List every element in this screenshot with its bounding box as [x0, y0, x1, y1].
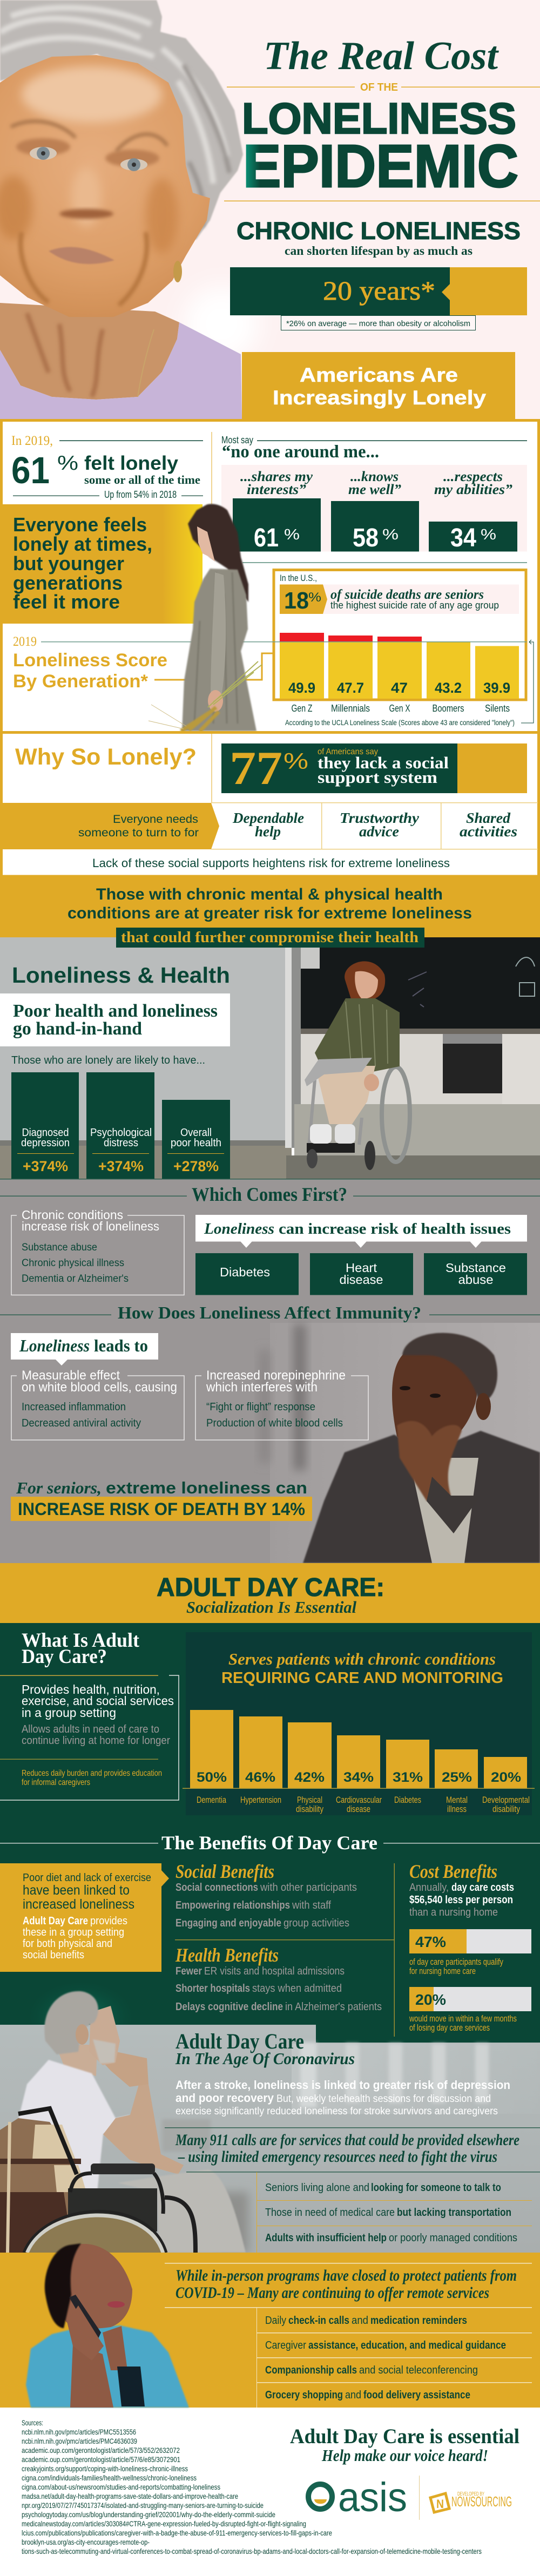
panel: gray immunity background	[0, 1179, 540, 1563]
box: heart disease: Heart	[346, 1261, 377, 1275]
title: LONELINESS	[242, 94, 516, 143]
panel: most say no one around me: my abilities”	[434, 482, 512, 497]
bar chart: patient conditions: Cardiovascular	[336, 1795, 382, 1805]
panel: younger generations callout: Everyone feels	[13, 513, 147, 536]
panel: what is adult day care: in a group setting	[22, 1706, 116, 1720]
panel: most say no one around me: %	[382, 526, 399, 543]
photo: elderly woman portrait	[0, 0, 259, 419]
box: increased norepinephrine: “Fight or flight” response	[206, 1401, 315, 1413]
text block: sources	[22, 2418, 482, 2555]
bar chart: patient conditions	[183, 1710, 535, 1814]
box: heart disease: disease	[339, 1273, 383, 1287]
panel: adult day care in the age of coronavirus: Adult Day Care	[176, 2029, 304, 2053]
list: remote services offered: and	[352, 2315, 368, 2327]
bar: overall poor health: Overall	[180, 1127, 212, 1139]
callout: increase risk of death by 14 percent: For seniors,	[16, 1478, 102, 1497]
box: diabetes: Diabetes	[220, 1265, 270, 1279]
bar: overall poor health: poor health	[171, 1137, 221, 1149]
bar: overall poor health: +278%	[173, 1158, 219, 1174]
logo: Oasis: asis	[338, 2474, 407, 2520]
text block: sources: brooklyn-usa.org/as-city-encourages-remote-op-	[22, 2538, 150, 2546]
text block: cost benefits: Annually,	[409, 1882, 449, 1894]
panel: 61 percent felt lonely: some or all of the time	[84, 473, 200, 486]
row: someone to turn to for: Trustworthy	[340, 810, 420, 826]
callout: poor diet and lack of exercise: Adult Day Care	[23, 1915, 88, 1927]
list: remote services offered: food delivery assistance	[363, 2389, 470, 2401]
panel: what is adult day care: Provides health, nutrition,	[22, 1682, 160, 1696]
bar chart: loneliness score by generation: Millennials	[331, 703, 370, 714]
callout: poor diet and lack of exercise	[0, 1863, 169, 1972]
bar chart: patient conditions: disease	[347, 1804, 370, 1814]
row: someone to turn to for: someone to turn to for	[78, 827, 199, 839]
text block: social benefits: group activities	[284, 1917, 349, 1929]
bar chart: loneliness score by generation: 47.7	[337, 680, 364, 696]
panel: green day care background	[0, 1623, 540, 2043]
text block: health benefits	[175, 1944, 382, 2013]
photo: thoughtful older man	[259, 1323, 540, 1563]
text block: health benefits: Shorter hospitals	[176, 1983, 250, 1994]
panel: which comes first	[0, 1184, 540, 1295]
text block: social benefits: Social Benefits	[176, 1861, 274, 1882]
text block: social benefits: with staff	[292, 1899, 331, 1911]
list: remote services offered: and social teleconferencing	[359, 2364, 478, 2376]
bar chart: patient conditions: Dementia	[197, 1795, 226, 1805]
box: chronic conditions: Chronic physical illness	[22, 1257, 124, 1269]
panel: suicide stat and generation chart: %	[308, 590, 321, 605]
call to action: Adult Day Care is essential	[290, 2425, 519, 2448]
bar chart: patient conditions: Diabetes	[394, 1795, 421, 1805]
list: who calls 911: Those in need of medical care	[265, 2207, 395, 2219]
heading: Americans Are Increasingly Lonely: Increasingly Lonely	[273, 387, 486, 409]
panel: most say no one around me: “no one around me...	[222, 442, 379, 462]
stat: chronic loneliness shortens lifespan: can shorten lifespan by as much as	[285, 244, 473, 258]
list: remote services offered	[256, 2308, 532, 2408]
panel: most say no one around me: %	[284, 526, 300, 543]
photo: man in wheelchair background	[0, 1979, 540, 2253]
panel: what is adult day care: Reduces daily burden and provides education	[22, 1769, 162, 1778]
panel: most say no one around me: %	[481, 526, 496, 543]
callout: loneliness leads to	[11, 1333, 158, 1365]
bar chart: loneliness score by generation	[280, 633, 519, 714]
bar chart: loneliness score by generation: 49.9	[288, 680, 315, 696]
logo: NowSourcing	[430, 2491, 512, 2512]
heading: Americans Are Increasingly Lonely: Americans Are	[300, 364, 458, 386]
heading: loneliness score by generation: 2019	[13, 634, 37, 649]
panel: adult day care in the age of coronavirus: After a stroke, loneliness is linked to greater risk of depression	[176, 2078, 510, 2092]
box: measurable effect on white blood cells: Decreased antiviral activity	[22, 1417, 141, 1429]
panel: suicide stat and generation chart	[274, 570, 534, 727]
text block: social benefits: Engaging and enjoyable	[176, 1917, 281, 1929]
panel: loneliness and health: Those who are lonely are likely to have...	[11, 1054, 205, 1066]
bar chart: patient conditions: 31%	[393, 1770, 423, 1785]
box: chronic conditions: increase risk of loneliness	[22, 1219, 159, 1233]
logo: NowSourcing: N	[436, 2497, 444, 2511]
text block: sources: psychologytoday.com/us/blog/understanding-grief/202001/why-do-the-elderly-commit-suicide	[22, 2510, 275, 2519]
panel: the benefits of day care: The Benefits Of Day Care	[161, 1832, 377, 1854]
photo: woman on the phone	[26, 2243, 189, 2408]
box: increased norepinephrine: Increased norepinephrine	[206, 1368, 346, 1383]
text block: health benefits: Health Benefits	[175, 1944, 279, 1966]
panel: adult day care in the age of coronavirus	[165, 2029, 540, 2253]
panel: younger generations callout: feel it more	[13, 591, 120, 613]
panel: suicide stat and generation chart: 18	[284, 587, 309, 614]
panel: chronic conditions callout: Those with chronic mental & physical health	[96, 885, 443, 903]
box: diabetes	[195, 1253, 299, 1295]
panel: loneliness and health	[0, 963, 230, 1179]
box: chronic conditions: Substance abuse	[22, 1242, 97, 1253]
call to action	[290, 2425, 519, 2465]
text block: sources: cigna.com/individuals-families/health-wellness/chronic-loneliness	[22, 2473, 197, 2482]
list: who calls 911: Seniors living alone and	[265, 2182, 369, 2194]
bar chart: patient conditions: disability	[296, 1804, 323, 1814]
title: The Real Cost	[264, 34, 499, 78]
panel: younger generations callout	[3, 504, 202, 624]
heading: adult day care: Socialization Is Essential	[186, 1598, 356, 1617]
text block: sources: npr.org/2019/07/27/745017374/isolated-and-struggling-many-seniors-are-turning-to-suicide	[22, 2501, 264, 2510]
list: remote services offered: Companionship calls	[265, 2364, 357, 2376]
list: who calls 911: looking for someone to talk to	[371, 2182, 501, 2194]
callout: poor diet and lack of exercise: social benefits	[23, 1949, 84, 1961]
bar chart: patient conditions: 42%	[294, 1770, 325, 1785]
panel: 61 percent felt lonely	[11, 432, 212, 504]
row: someone to turn to for	[0, 802, 538, 850]
panel: chronic conditions callout: conditions are at greater risk for extreme loneliness	[68, 904, 472, 922]
list: who calls 911: or poorly managed conditions	[389, 2232, 517, 2244]
panel: loneliness and health: Loneliness & Health	[12, 963, 230, 988]
bar: diagnosed depression: depression	[21, 1137, 70, 1149]
panel: adult day care in the age of coronavirus: But, weekly telehealth sessions for discussion and	[276, 2093, 491, 2105]
text block: cost benefits: $56,540 less per person	[409, 1894, 513, 1906]
list: remote services offered: Grocery shopping	[265, 2389, 343, 2401]
panel: hero background	[0, 0, 540, 421]
panel: what is adult day care: continue living at home for longer	[22, 1735, 170, 1747]
bar: diagnosed depression: +374%	[23, 1158, 68, 1174]
panel: the benefits of day care	[0, 1832, 540, 2037]
list: remote services offered: check-in calls	[288, 2315, 349, 2327]
panel: suicide stat and generation chart: the highest suicide rate of any age group	[330, 600, 499, 611]
panel: remote services	[0, 2253, 540, 2408]
bar: diagnosed depression: Diagnosed	[22, 1127, 69, 1139]
box: measurable effect on white blood cells: Measurable effect	[22, 1368, 120, 1383]
text block: cost benefits: of day care participants qualify	[409, 1957, 503, 1967]
bar: diagnosed depression	[11, 1072, 79, 1179]
row: someone to turn to for: Everyone needs	[113, 813, 198, 826]
bar: psychological distress: distress	[104, 1137, 138, 1149]
callout: poor diet and lack of exercise: provides	[90, 1915, 127, 1927]
text block: sources: academic.oup.com/gerontologist/article/57/3/552/2632072	[22, 2446, 180, 2455]
panel: what is adult day care: Allows adults in need of care to	[22, 1723, 159, 1735]
panel: adult day care in the age of coronavirus: and poor recovery	[176, 2091, 274, 2105]
list: remote services offered: medication reminders	[370, 2315, 467, 2327]
title	[224, 34, 540, 201]
text block: cost benefits: day care costs	[451, 1882, 514, 1894]
stat: 77 percent lack a social support system: they lack a social	[318, 753, 449, 772]
bar chart: loneliness score by generation: Silents	[485, 703, 510, 714]
panel: loneliness and health: go hand-in-hand	[13, 1019, 142, 1039]
bar chart: loneliness score by generation: Gen X	[389, 703, 410, 714]
panel: why so lonely: Why So Lonely?	[15, 744, 197, 770]
text block: cost benefits	[409, 1861, 531, 2033]
bar chart: loneliness score by generation: Gen Z	[292, 703, 312, 714]
text block: social benefits: with other participants	[260, 1882, 357, 1894]
stat: chronic loneliness shortens lifespan	[230, 217, 527, 330]
text block: sources: lcius.com/publications/publications/caregiver-with-a-badge-the-abuse-of-911-emergency-services-to-fill-gaps-in-care	[22, 2528, 332, 2537]
panel: 61 percent felt lonely: felt lonely	[84, 452, 178, 474]
panel: why so lonely: Lack of these social supports heightens risk for extreme loneliness	[92, 856, 450, 870]
heading: loneliness score by generation: Loneliness Score	[13, 650, 167, 671]
box: measurable effect on white blood cells	[11, 1368, 184, 1440]
list: who calls 911: Adults with insufficient help	[265, 2232, 387, 2244]
bar chart: loneliness score by generation: 39.9	[483, 680, 510, 696]
box: substance abuse: Substance	[446, 1261, 506, 1275]
panel: why so lonely	[0, 732, 539, 876]
stat: 77 percent lack a social support system: 77	[230, 742, 282, 795]
text block: social benefits: Social connections	[176, 1882, 258, 1894]
text block: sources: Sources:	[22, 2418, 43, 2427]
callout: loneliness can increase risk of health issues: can increase risk of health issues	[279, 1220, 511, 1238]
stat: chronic loneliness shortens lifespan: 20 years*	[323, 275, 435, 306]
text block: sources: creakyjoints.org/support/coping-with-loneliness-chronic-illness	[22, 2464, 188, 2473]
panel: what is adult day care: What Is Adult	[22, 1630, 140, 1652]
panel: what is adult day care: exercise, and social services	[22, 1694, 174, 1708]
heading: loneliness score by generation: By Generation*	[13, 671, 148, 692]
panel: younger generations callout: lonely at times,	[13, 533, 152, 555]
box: substance abuse: abuse	[458, 1273, 494, 1287]
bar: psychological distress: Psychological	[90, 1127, 152, 1139]
panel: chronic conditions chart: REQUIRING CARE AND MONITORING	[221, 1669, 503, 1687]
text block: sources: medicalnewstoday.com/articles/303084#CTRA-gene-expression-fueled-by-disrupted-fight-or-flight-signaling	[22, 2519, 306, 2528]
panel: adult day care in the age of coronavirus: exercise significantly reduced loneliness for stroke survivors and caregivers	[176, 2106, 498, 2117]
box: measurable effect on white blood cells: on white blood cells, causing	[22, 1380, 177, 1395]
panel: 61 percent felt lonely: %	[57, 452, 78, 475]
photo: woman in wheelchair in kitchen	[0, 937, 540, 1179]
box: chronic conditions: Chronic conditions	[22, 1208, 123, 1222]
callout: poor diet and lack of exercise: Poor diet and lack of exercise	[23, 1872, 151, 1884]
panel: loneliness and health: Poor health and loneliness	[13, 1001, 218, 1021]
text block: cost benefits: of losing day care services	[409, 2023, 490, 2033]
panel: 61 percent felt lonely: In 2019,	[11, 434, 53, 448]
panel: most say no one around me: ...respects	[443, 469, 503, 484]
list: remote services offered: assistance, education, and medical guidance	[308, 2340, 506, 2351]
logo: Oasis	[308, 2474, 407, 2520]
stat: 77 percent lack a social support system: of Americans say	[318, 747, 378, 756]
text block: sources: madsa.net/adult-day-health-programs-save-state-dollars-and-improve-health-care	[22, 2492, 238, 2500]
row: someone to turn to for: Shared	[466, 810, 511, 826]
text block: cost benefits: Cost Benefits	[409, 1861, 497, 1882]
callout: loneliness leads to: leads to	[94, 1336, 148, 1355]
panel: most say no one around me	[221, 435, 527, 563]
text block: sources: ncbi.nlm.nih.gov/pmc/articles/PMC5513556	[22, 2428, 136, 2436]
callout: loneliness can increase risk of health issues: Loneliness	[204, 1220, 274, 1238]
bar: psychological distress: +374%	[98, 1158, 144, 1174]
list: remote services offered: and	[345, 2389, 361, 2401]
text block: sources: cigna.com/about-us/newsroom/studies-and-reports/combatting-loneliness	[22, 2483, 220, 2491]
box: increased norepinephrine: Production of white blood cells	[206, 1417, 343, 1429]
callout: increase risk of death by 14 percent	[11, 1478, 312, 1521]
bar chart: patient conditions: disability	[492, 1804, 520, 1814]
panel: what is adult day care	[0, 1630, 179, 1800]
panel: most say no one around me: ...shares my	[240, 469, 313, 484]
panel: most say no one around me: ...knows	[350, 469, 399, 484]
box: increased norepinephrine	[195, 1368, 368, 1440]
box: chronic conditions: Dementia or Alzheimer's	[22, 1273, 129, 1284]
bar chart: patient conditions: 20%	[491, 1770, 521, 1785]
text block: health benefits: stays when admitted	[252, 1983, 342, 1994]
box: substance abuse	[424, 1253, 527, 1295]
panel: suicide stat and generation chart: of suicide deaths are seniors	[330, 587, 484, 602]
logo: NowSourcing: DEVELOPED BY	[457, 2491, 484, 2497]
panel: most say no one around me: 58	[353, 524, 379, 552]
row: someone to turn to for: help	[255, 823, 281, 840]
panel: chronic conditions chart	[183, 1632, 535, 1815]
box: chronic conditions	[11, 1208, 184, 1295]
panel: increasingly lonely frame	[1, 420, 539, 732]
bar: psychological distress	[86, 1072, 154, 1179]
row: someone to turn to for: activities	[460, 823, 517, 840]
bar chart: patient conditions: illness	[447, 1804, 467, 1814]
text block: health benefits: in Alzheimer's patients	[285, 2001, 382, 2013]
panel: most say no one around me: interests”	[247, 482, 306, 497]
text block: social benefits: Empowering relationships	[176, 1899, 290, 1911]
text block: health benefits: Fewer	[176, 1965, 202, 1977]
list: who calls 911	[256, 2172, 532, 2253]
panel: what is adult day care: Day Care?	[22, 1646, 107, 1668]
panel: how does loneliness affect immunity	[0, 1303, 540, 1521]
callout: poor diet and lack of exercise: have been linked to	[23, 1883, 130, 1898]
text block: sources: ncbi.nlm.nih.gov/pmc/articles/PMC4636039	[22, 2437, 137, 2445]
stat: 77 percent lack a social support system: support system	[318, 768, 437, 787]
panel: adult day care in the age of coronavirus: In The Age Of Coronavirus	[175, 2049, 355, 2068]
panel: chronic conditions callout	[0, 876, 540, 938]
bar chart: patient conditions: Hypertension	[240, 1795, 281, 1805]
bar chart: loneliness score by generation: 47	[391, 680, 408, 696]
row: someone to turn to for: advice	[359, 823, 399, 840]
callout: increase risk of death by 14 percent: INCREASE RISK OF DEATH BY 14%	[18, 1499, 305, 1519]
heading: adult day care: ADULT DAY CARE:	[157, 1573, 384, 1602]
stat: chronic loneliness shortens lifespan: CHRONIC LONELINESS	[237, 217, 521, 245]
title: EPIDEMIC	[243, 133, 518, 200]
panel: most say no one around me: 34	[450, 524, 476, 552]
panel: younger generations callout: generations	[13, 572, 123, 594]
panel: most say no one around me: me well”	[348, 482, 401, 497]
stat: chronic loneliness shortens lifespan: *26% on average — more than obesity or alcoholism	[286, 319, 470, 328]
banner: that could further compromise their health: that could further compromise their health	[121, 929, 418, 946]
text block: cost benefits: than a nursing home	[409, 1906, 498, 1918]
bar chart: loneliness score by generation: 43.2	[435, 680, 462, 696]
callout: poor diet and lack of exercise: increased loneliness	[23, 1897, 134, 1912]
row: someone to turn to for: Dependable	[232, 810, 304, 826]
bar chart: loneliness score by generation: Boomers	[432, 703, 464, 714]
text block: cost benefits: 47%	[415, 1933, 446, 1950]
panel: what is adult day care: for informal caregivers	[22, 1778, 90, 1787]
panel: chronic conditions chart: Serves patients with chronic conditions	[228, 1649, 496, 1668]
callout: loneliness can increase risk of health issues	[195, 1215, 527, 1248]
callout: poor diet and lack of exercise: these in a group setting	[23, 1926, 124, 1938]
panel: 61 percent felt lonely: 61	[11, 449, 50, 491]
stat: 77 percent lack a social support system	[221, 742, 527, 795]
bar: overall poor health	[162, 1100, 230, 1179]
box: measurable effect on white blood cells: Increased inflammation	[22, 1401, 126, 1413]
box: increased norepinephrine: which interferes with	[206, 1380, 318, 1395]
call to action: Help make our voice heard!	[321, 2446, 488, 2465]
bar chart: patient conditions: 46%	[245, 1770, 275, 1785]
heading: adult day care	[0, 1563, 540, 1623]
heading: loneliness score by generation	[13, 634, 273, 692]
bar chart: patient conditions: Physical	[297, 1795, 322, 1805]
text block: health benefits: Delays cognitive decline	[176, 2001, 283, 2013]
text block: cost benefits: 20%	[415, 1991, 446, 2008]
panel: 61 percent felt lonely: Up from 54% in 2018	[104, 489, 177, 500]
panel: how does loneliness affect immunity: How Does Loneliness Affect Immunity?	[118, 1303, 421, 1322]
bar chart: patient conditions: 50%	[197, 1770, 227, 1785]
bar chart: patient conditions: 25%	[442, 1770, 472, 1785]
text block: cost benefits: for nursing home care	[409, 1966, 476, 1976]
callout: increase risk of death by 14 percent: extreme loneliness can	[106, 1478, 307, 1497]
text block: sources: academic.oup.com/gerontologist/article/57/6/e85/3072901	[22, 2455, 180, 2464]
panel: which comes first: Which Comes First?	[192, 1184, 347, 1205]
callout: loneliness leads to: Loneliness	[19, 1336, 90, 1355]
list: who calls 911: but lacking transportation	[397, 2207, 511, 2219]
text block: health benefits: ER visits and hospital admissions	[204, 1965, 345, 1977]
box: heart disease	[310, 1253, 413, 1295]
list: remote services offered: Daily	[265, 2315, 286, 2327]
panel: suicide stat and generation chart: In the U.S.,	[280, 573, 317, 583]
bar chart: patient conditions: 34%	[343, 1770, 374, 1785]
bar chart: patient conditions: Mental	[446, 1795, 468, 1805]
title: OF THE	[360, 82, 398, 93]
panel: most say no one around me: 61	[254, 524, 279, 552]
text block: social benefits	[176, 1861, 357, 1929]
photo: young woman with wheat bouquet	[148, 504, 262, 731]
callout: poor diet and lack of exercise: for both physical and	[23, 1938, 112, 1950]
stat: 77 percent lack a social support system: %	[284, 748, 308, 774]
panel: younger generations callout: but younger	[13, 552, 124, 574]
list: remote services offered: Caregiver	[265, 2340, 306, 2351]
panel: most say no one around me: Most say	[221, 435, 253, 445]
heading: Americans Are Increasingly Lonely	[242, 352, 515, 420]
